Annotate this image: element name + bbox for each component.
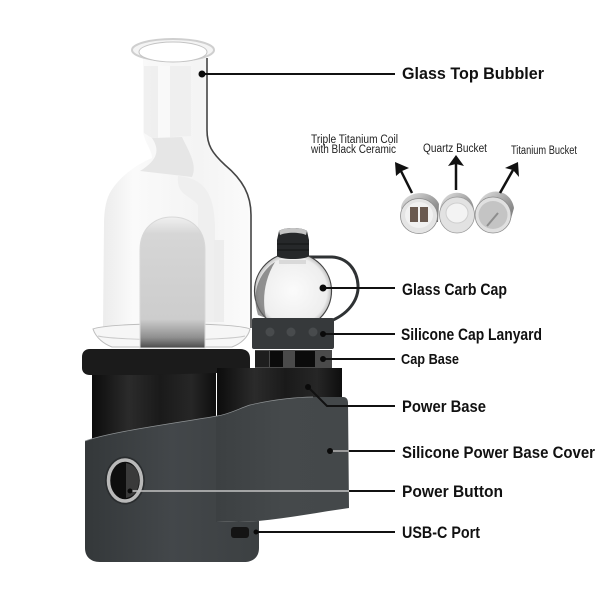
inner dome xyxy=(140,217,205,348)
glass ball xyxy=(254,253,332,329)
label: glass carb cap: Glass Carb Cap xyxy=(402,281,507,299)
leader lines xyxy=(130,74,395,532)
bottle body xyxy=(103,58,251,328)
usb-c port xyxy=(231,527,249,538)
power button xyxy=(105,456,145,504)
black collar xyxy=(82,349,250,375)
inner tube xyxy=(214,240,224,322)
glass top bubbler xyxy=(93,39,251,348)
lanyard xyxy=(306,257,358,322)
label: usb-c port: USB-C Port xyxy=(402,524,480,542)
right black body xyxy=(217,368,342,418)
cover front xyxy=(85,416,259,562)
rear black body xyxy=(92,372,216,444)
cap base windows xyxy=(255,351,315,367)
label: silicone cap lanyard: Silicone Cap Lanyard xyxy=(401,326,542,344)
cap ridges xyxy=(277,244,309,250)
bucket labels xyxy=(310,134,578,157)
label: coil: with Black Ceramic xyxy=(310,144,396,156)
inner stem xyxy=(140,137,194,177)
label: quartz: Quartz Bucket xyxy=(423,143,488,155)
arrows xyxy=(395,155,519,193)
label: glass top bubbler: Glass Top Bubbler xyxy=(402,65,545,83)
cover top edge highlight xyxy=(85,397,313,441)
silicone band xyxy=(252,318,334,349)
cap rim xyxy=(279,228,307,235)
bucket: titanium xyxy=(475,192,514,233)
neck highlight xyxy=(158,66,170,138)
bucket: titanium coil xyxy=(400,193,439,234)
band holes xyxy=(266,328,318,336)
cap base xyxy=(255,350,332,368)
bottle rim xyxy=(132,39,214,61)
arrow: quartz xyxy=(448,155,464,190)
label: power base: Power Base xyxy=(402,398,486,416)
label: power button: Power Button xyxy=(402,483,503,501)
bucket: quartz xyxy=(440,193,474,233)
silicone power base cover xyxy=(85,397,349,562)
neck inner shade xyxy=(144,66,191,138)
inner right shade xyxy=(178,176,215,322)
cap top xyxy=(277,228,309,259)
bottle flange xyxy=(93,324,250,347)
label: titanium: Titanium Bucket xyxy=(511,145,578,157)
label: coil: Triple Titanium Coil xyxy=(311,134,398,146)
part labels xyxy=(401,65,596,542)
leader dots xyxy=(128,70,333,534)
power base xyxy=(82,349,342,444)
arrow: coil xyxy=(395,162,412,193)
bottle right edge xyxy=(207,58,251,328)
arrow: titanium xyxy=(500,162,519,193)
cap neck xyxy=(279,260,306,264)
carb cap assembly xyxy=(252,228,358,368)
label: cap base: Cap Base xyxy=(401,351,459,368)
ball left shade xyxy=(255,262,275,318)
cover upper panel xyxy=(216,397,349,522)
buckets xyxy=(400,192,514,234)
label: coil xyxy=(310,134,398,156)
